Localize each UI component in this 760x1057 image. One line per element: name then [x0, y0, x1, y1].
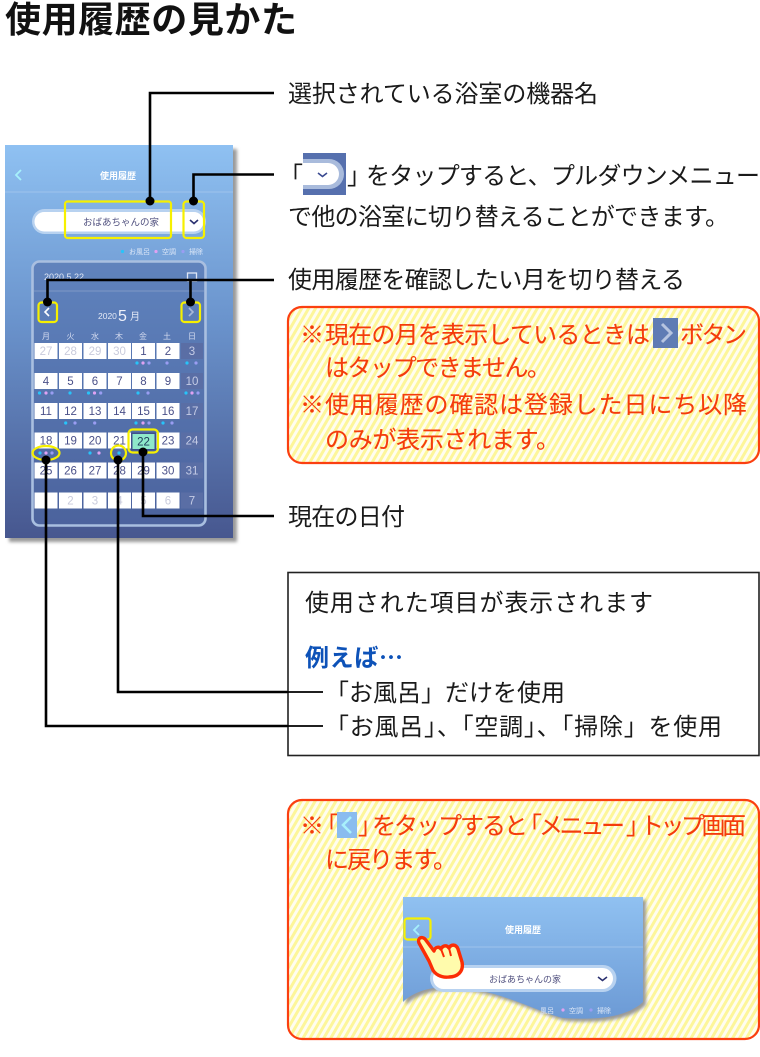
title: 使用履歴の見かた — [5, 0, 297, 40]
calendar cells: 7 — [189, 496, 195, 508]
calendar cells: 10 — [186, 376, 198, 388]
calendar cells: 27 — [89, 466, 101, 478]
leader lines — [42, 93, 323, 726]
yellow highlights — [32, 202, 204, 460]
today cell 22: 22 — [137, 436, 150, 448]
label: month switch: 使用履歴を確認したい月を切り替える — [288, 267, 685, 294]
screenshot excerpt: 掃除 — [597, 1006, 611, 1015]
weekday header: 日 — [188, 332, 196, 341]
panel: usage items: 「お風呂」、「空調」、「掃除」を使用 — [325, 714, 722, 741]
panel: usage items: 例えば… — [305, 638, 403, 673]
calendar cells: 5 — [67, 376, 74, 388]
legend — [121, 247, 203, 256]
screenshot excerpt: おばあちゃんの家 — [489, 974, 561, 984]
calendar cells: 11 — [40, 406, 52, 418]
icon: tapping hand — [419, 938, 462, 977]
calendar cells: 17 — [186, 406, 198, 418]
label: dropdown explanation: 「 — [279, 163, 303, 190]
calendar cells: 18 — [40, 436, 52, 448]
panel: usage items: 「お風呂」だけを使用 — [325, 680, 565, 707]
calendar cells: 30 — [162, 466, 174, 478]
calendar cells: 1 — [140, 346, 147, 358]
screen title: 使用履歴 — [100, 170, 136, 181]
icon: next button — [653, 318, 678, 348]
label: dropdown explanation — [279, 153, 760, 231]
calendar panel: 2020 — [98, 311, 117, 321]
label: device name: 選択されている浴室の機器名 — [288, 81, 598, 108]
usage dots — [38, 361, 200, 455]
callout: month note: のみが表示されます。 — [325, 427, 560, 454]
panel: usage items: 使用された項目が表示されます — [305, 590, 653, 617]
calendar cells: 31 — [186, 466, 198, 478]
calendar panel: 5 — [118, 308, 127, 325]
today cell 22 — [131, 432, 156, 450]
calendar panel: 2020.5.22 — [44, 272, 84, 282]
calendar cells: 7 — [116, 376, 123, 388]
calendar cells — [34, 343, 203, 508]
icon: back arrow — [16, 170, 21, 180]
screenshot excerpt — [403, 897, 646, 1022]
icon: back button — [337, 812, 357, 838]
calendar cells: 29 — [89, 346, 101, 358]
weekday header: 土 — [163, 331, 171, 341]
callout: month note: 使用履歴の確認は登録した日にち以降 — [325, 392, 747, 419]
callout: back button note: トップ画面 — [640, 813, 746, 840]
dropdown pill — [32, 209, 206, 234]
calendar cells: 28 — [64, 346, 77, 358]
calendar cells: 3 — [189, 346, 195, 358]
weekday header: 月 — [42, 332, 50, 341]
callout: back button note — [288, 800, 759, 1039]
calendar cells: 6 — [165, 496, 171, 508]
calendar cells: 6 — [92, 376, 98, 388]
callout: month note: ボタン — [680, 322, 747, 349]
weekday header: 火 — [66, 332, 74, 341]
calendar panel — [32, 262, 206, 526]
calendar cells: 14 — [113, 406, 126, 418]
calendar cells: 21 — [113, 436, 126, 448]
callout: back button note: をタップすると — [372, 813, 528, 840]
weekday header: 木 — [115, 331, 123, 341]
label: dropdown explanation: で他の浴室に切り替えることができます。 — [288, 204, 729, 231]
callout: back button note: に戻ります。 — [325, 847, 457, 874]
calendar cells: 16 — [162, 406, 174, 418]
callout: month note: ※ — [300, 322, 324, 349]
calendar cells: 20 — [89, 436, 101, 448]
callout: month note: 現在の月を表示しているときは — [325, 322, 650, 349]
calendar cells: 3 — [92, 496, 98, 508]
calendar cells: 12 — [64, 406, 77, 418]
callout: month note: はタップできません。 — [325, 355, 551, 382]
calendar cells: 27 — [40, 346, 52, 358]
callout: month note — [288, 307, 759, 463]
legend: 掃除 — [189, 247, 203, 256]
calendar cells: 15 — [137, 406, 150, 418]
calendar cells: 26 — [64, 466, 77, 478]
callout: back button note: 「 — [315, 813, 339, 840]
calendar cells: 8 — [140, 376, 147, 388]
callout: back button note: ※ — [300, 813, 324, 840]
calendar cells: 24 — [186, 436, 199, 448]
callout: month note: ※ — [300, 392, 324, 419]
calendar cells: 23 — [162, 436, 174, 448]
screenshot excerpt: 使用履歴 — [505, 924, 541, 935]
calendar cells: 19 — [64, 436, 77, 448]
callout: back button note: メニュー — [539, 813, 625, 840]
weekday header: 金 — [139, 331, 147, 341]
screenshot excerpt: 風呂 — [540, 1007, 554, 1015]
calendar cells: 9 — [165, 376, 171, 388]
screenshot excerpt: 空調 — [569, 1007, 583, 1015]
panel: usage items — [280, 572, 759, 756]
icon: dropdown button — [303, 153, 346, 195]
label: current date: 現在の日付 — [288, 504, 405, 531]
calendar cells: 25 — [40, 466, 52, 478]
legend: 空調 — [162, 248, 176, 256]
calendar cells: 2 — [165, 346, 171, 358]
legend: お風呂 — [129, 248, 150, 256]
calendar cells: 5 — [140, 496, 147, 508]
calendar cells: 13 — [89, 406, 101, 418]
callout: back button note: 「 — [518, 813, 542, 840]
calendar cells: 4 — [43, 376, 50, 388]
callout: back button note: 」 — [358, 813, 382, 840]
calendar cells: 30 — [113, 346, 126, 358]
calendar cells: 2 — [67, 496, 74, 508]
calendar cells: 4 — [116, 496, 123, 508]
weekday header: 水 — [91, 331, 99, 341]
calendar panel: 月 — [130, 311, 140, 323]
panel: app screenshot — [5, 145, 237, 542]
dropdown pill: おばあちゃんの家 — [83, 216, 159, 228]
calendar cells: 28 — [113, 466, 126, 478]
calendar cells: 29 — [137, 466, 150, 478]
label: dropdown explanation: をタップすると、プルダウンメニュー — [366, 163, 760, 190]
label: dropdown explanation: 」 — [347, 163, 371, 190]
weekday header — [42, 331, 196, 341]
callout: back button note: 」 — [626, 813, 650, 840]
